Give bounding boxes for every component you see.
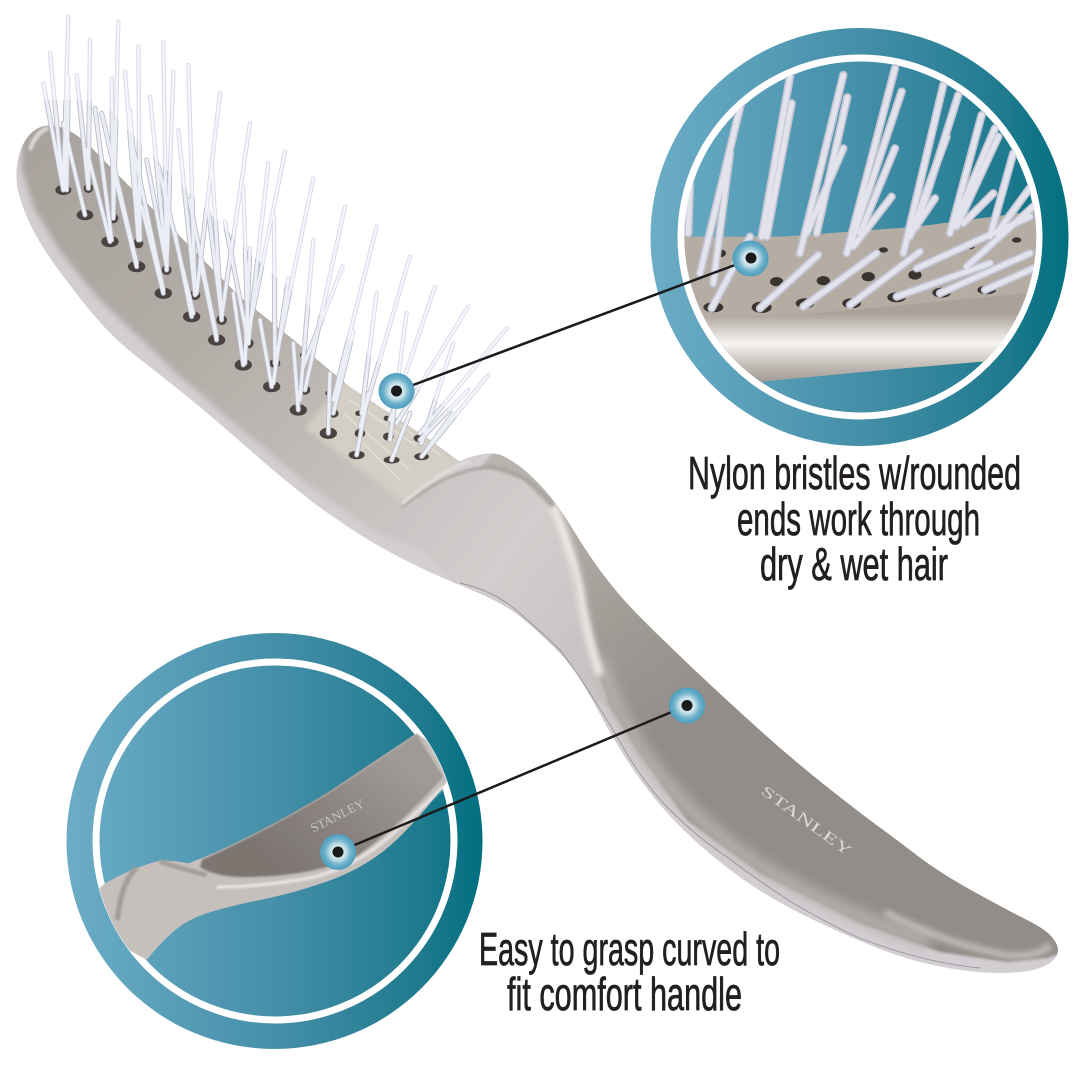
panel: bristle close-up circle (650, 28, 1068, 446)
caption: bristles (688, 447, 1021, 590)
marker: bristles close-up (732, 240, 768, 276)
panel: handle close-up circle (66, 633, 482, 1049)
callout line: bristles (397, 259, 751, 391)
marker: handle on brush (669, 688, 705, 724)
caption: handle: Easy to grasp curved to (479, 923, 780, 975)
brush body (16, 126, 1058, 973)
caption: bristles: dry & wet hair (760, 538, 948, 590)
logo on handle: STANLEY (758, 783, 855, 860)
bristle close-up detail (677, 68, 1043, 382)
marker: handle close-up (320, 834, 356, 870)
close-up logo: STANLEY (308, 796, 367, 835)
bristles (43, 17, 507, 460)
bristle holes (55, 184, 429, 464)
marker: bristles on brush (378, 373, 414, 409)
handle close-up detail (93, 733, 460, 960)
brush shading (22, 116, 1070, 968)
callout line: handle (338, 706, 687, 852)
caption: handle (479, 923, 780, 1020)
caption: handle: fit comfort handle (507, 968, 742, 1020)
